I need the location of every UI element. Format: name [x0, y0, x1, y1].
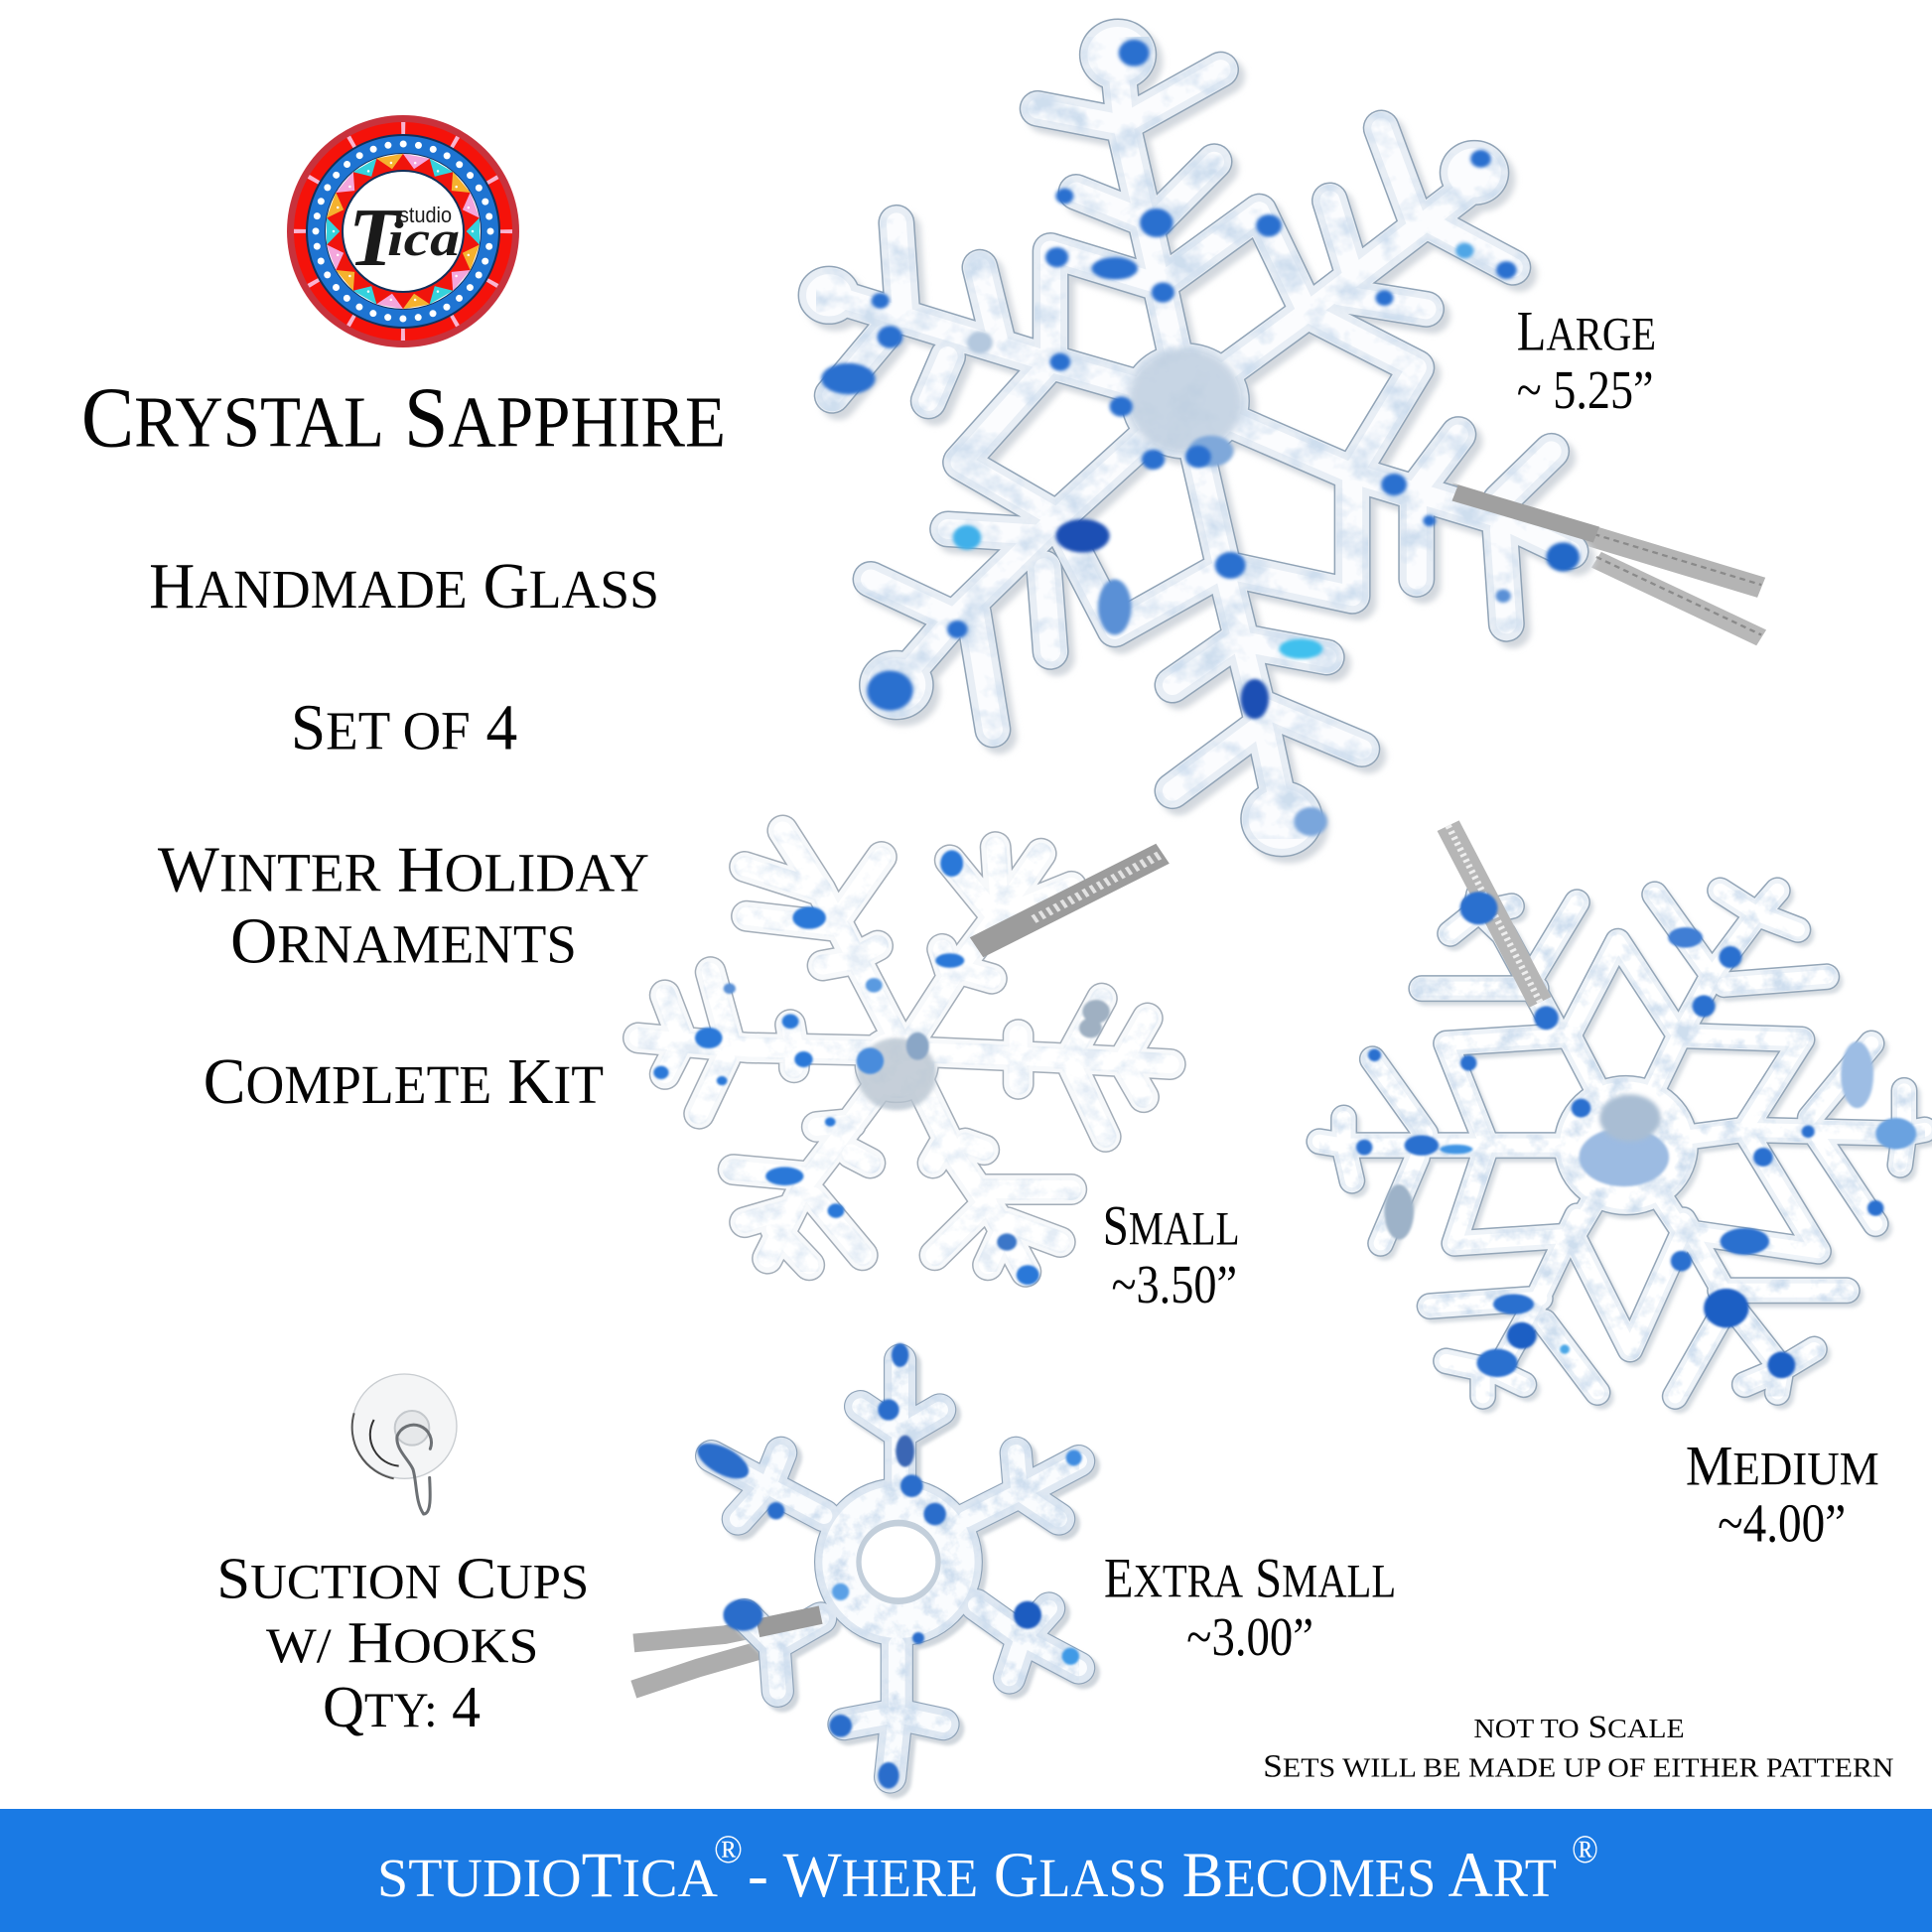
ribbon: small: [977, 854, 1163, 947]
suction cups text: [216, 1546, 589, 1739]
size label: large: LARGE: [1517, 300, 1656, 362]
size label: large: ~ 5.25”: [1517, 359, 1654, 420]
banner text: - WHERE GLASS BECOMES ART: [748, 1840, 1557, 1911]
banner text: ®: [714, 1827, 743, 1871]
size label: large: [1517, 300, 1656, 420]
size label: extra small: ~3.00”: [1186, 1606, 1313, 1667]
note: [1263, 1709, 1894, 1784]
feature: winter holiday ornaments: WINTER HOLIDAY: [158, 833, 649, 905]
size label: small: [1103, 1195, 1240, 1314]
suction cups text: QTY: 4: [323, 1674, 481, 1739]
size label: small: SMALL: [1103, 1195, 1240, 1258]
blue glass patches: large: [821, 40, 1580, 836]
logo: studio Tica: studio: [399, 203, 452, 227]
logo: studio Tica: ica: [387, 210, 460, 266]
size label: medium: [1686, 1436, 1879, 1554]
blue glass patches: extra small: [692, 1343, 1082, 1789]
size label: small: ~3.50”: [1111, 1254, 1237, 1314]
banner text: [377, 1827, 1598, 1911]
feature: winter holiday ornaments: [158, 833, 649, 977]
ribbon: extra small: [633, 1615, 821, 1690]
logo: studio Tica: T: [348, 192, 403, 284]
size label: medium: ~4.00”: [1718, 1493, 1846, 1554]
size label: medium: MEDIUM: [1686, 1436, 1879, 1498]
title: CRYSTAL SAPPHIRE: [81, 369, 726, 465]
suction cups text: W/ HOOKS: [266, 1609, 538, 1675]
suction cups text: SUCTION CUPS: [216, 1546, 589, 1611]
size label: extra small: EXTRA SMALL: [1104, 1547, 1396, 1609]
blue glass patches: medium: [1356, 892, 1916, 1378]
icon: suction cup with hook: [352, 1374, 457, 1514]
footer banner: [0, 1809, 1932, 1932]
snowflake: extra small: [633, 1343, 1083, 1789]
note: SETS WILL BE MADE UP OF EITHER PATTERN: [1263, 1748, 1894, 1784]
feature: handmade glass: HANDMADE GLASS: [149, 550, 659, 622]
snowflake: medium: [1319, 826, 1929, 1401]
blue glass patches: small: [653, 850, 1110, 1285]
ribbon: large: [1449, 490, 1761, 637]
snowflake: large: [816, 37, 1761, 846]
text labels: [81, 300, 1894, 1784]
banner text: ®: [1572, 1827, 1598, 1871]
feature: winter holiday ornaments: ORNAMENTS: [230, 904, 577, 977]
ribbon: medium: [1449, 826, 1540, 1002]
feature: set of 4: SET OF 4: [291, 692, 517, 764]
note: NOT TO SCALE: [1473, 1709, 1685, 1744]
logo: studio Tica: [287, 115, 519, 347]
banner text: STUDIOTICA: [377, 1840, 719, 1911]
size label: extra small: [1104, 1547, 1396, 1667]
snowflake: small: [638, 831, 1171, 1285]
feature: complete kit: COMPLETE KIT: [204, 1045, 604, 1118]
